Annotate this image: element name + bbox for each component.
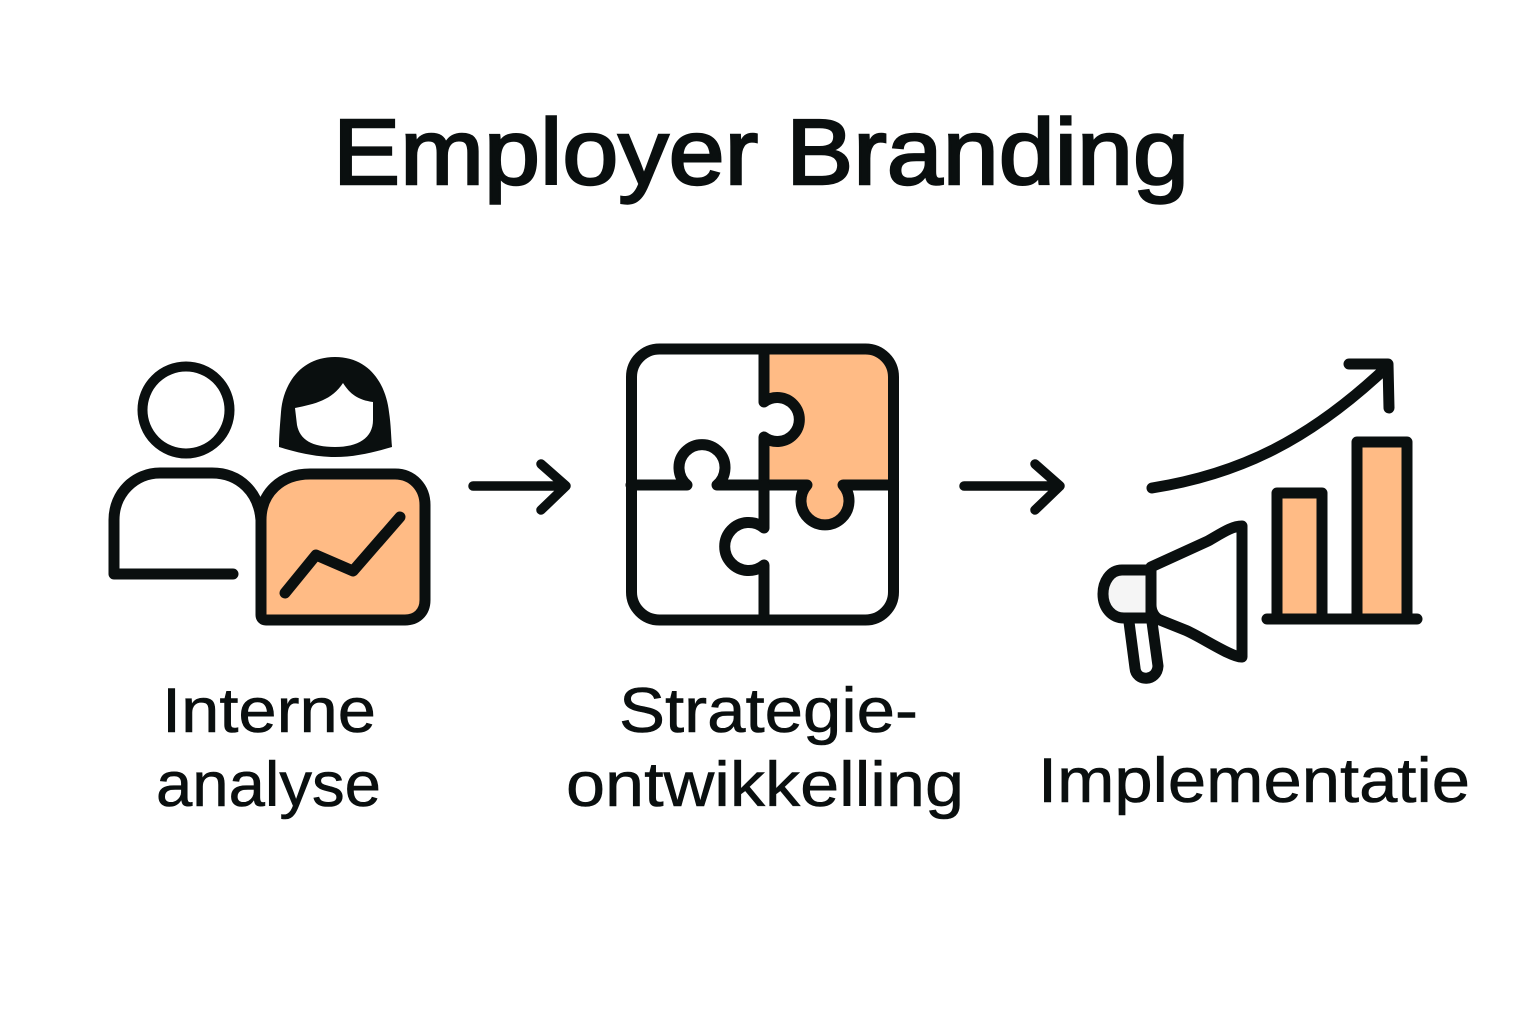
icon: megaphone cone [1151, 526, 1242, 657]
icon: megaphone with growth chart [1103, 364, 1417, 678]
icon: megaphone handle [1129, 622, 1158, 678]
puzzle piece: orange top right [764, 349, 893, 525]
puzzle vertical seam top [764, 349, 799, 485]
step 1: interne analyse [114, 357, 425, 820]
puzzle horizontal seam left [631, 445, 764, 485]
label: interne analyse [156, 676, 381, 820]
puzzle outer frame [632, 349, 894, 620]
title: Employer Branding [333, 100, 1189, 204]
icon: male head [142, 366, 230, 454]
icon: rising line chart [285, 517, 400, 593]
label: strategie-ontwikkelling: ontwikkelling [566, 750, 964, 820]
puzzle horizontal seam right [764, 485, 893, 525]
icon: short bar [1277, 493, 1322, 618]
step 3: implementatie [1038, 364, 1470, 816]
icon: puzzle [631, 349, 894, 620]
icon: megaphone back [1103, 570, 1151, 618]
label: strategie-ontwikkelling [566, 676, 964, 820]
label: interne analyse: Interne [162, 676, 376, 746]
icon: female body with chart panel [261, 474, 425, 620]
label: interne analyse: analyse [156, 750, 381, 820]
icon: male body [114, 473, 261, 574]
label: implementatie: Implementatie [1038, 746, 1470, 816]
icon: chart baseline [1267, 614, 1417, 624]
arrow: strategy to implementation [964, 464, 1060, 510]
icon: growth arrow [1152, 364, 1389, 488]
icon: female hair [279, 357, 392, 457]
icon: tall bar [1357, 442, 1407, 618]
puzzle vertical seam bottom [725, 485, 764, 620]
step 2: strategie-ontwikkelling [566, 349, 964, 820]
arrow: analysis to strategy [473, 464, 566, 510]
label: strategie-ontwikkelling: Strategie- [619, 676, 918, 746]
icon: two people with chart [114, 357, 425, 620]
